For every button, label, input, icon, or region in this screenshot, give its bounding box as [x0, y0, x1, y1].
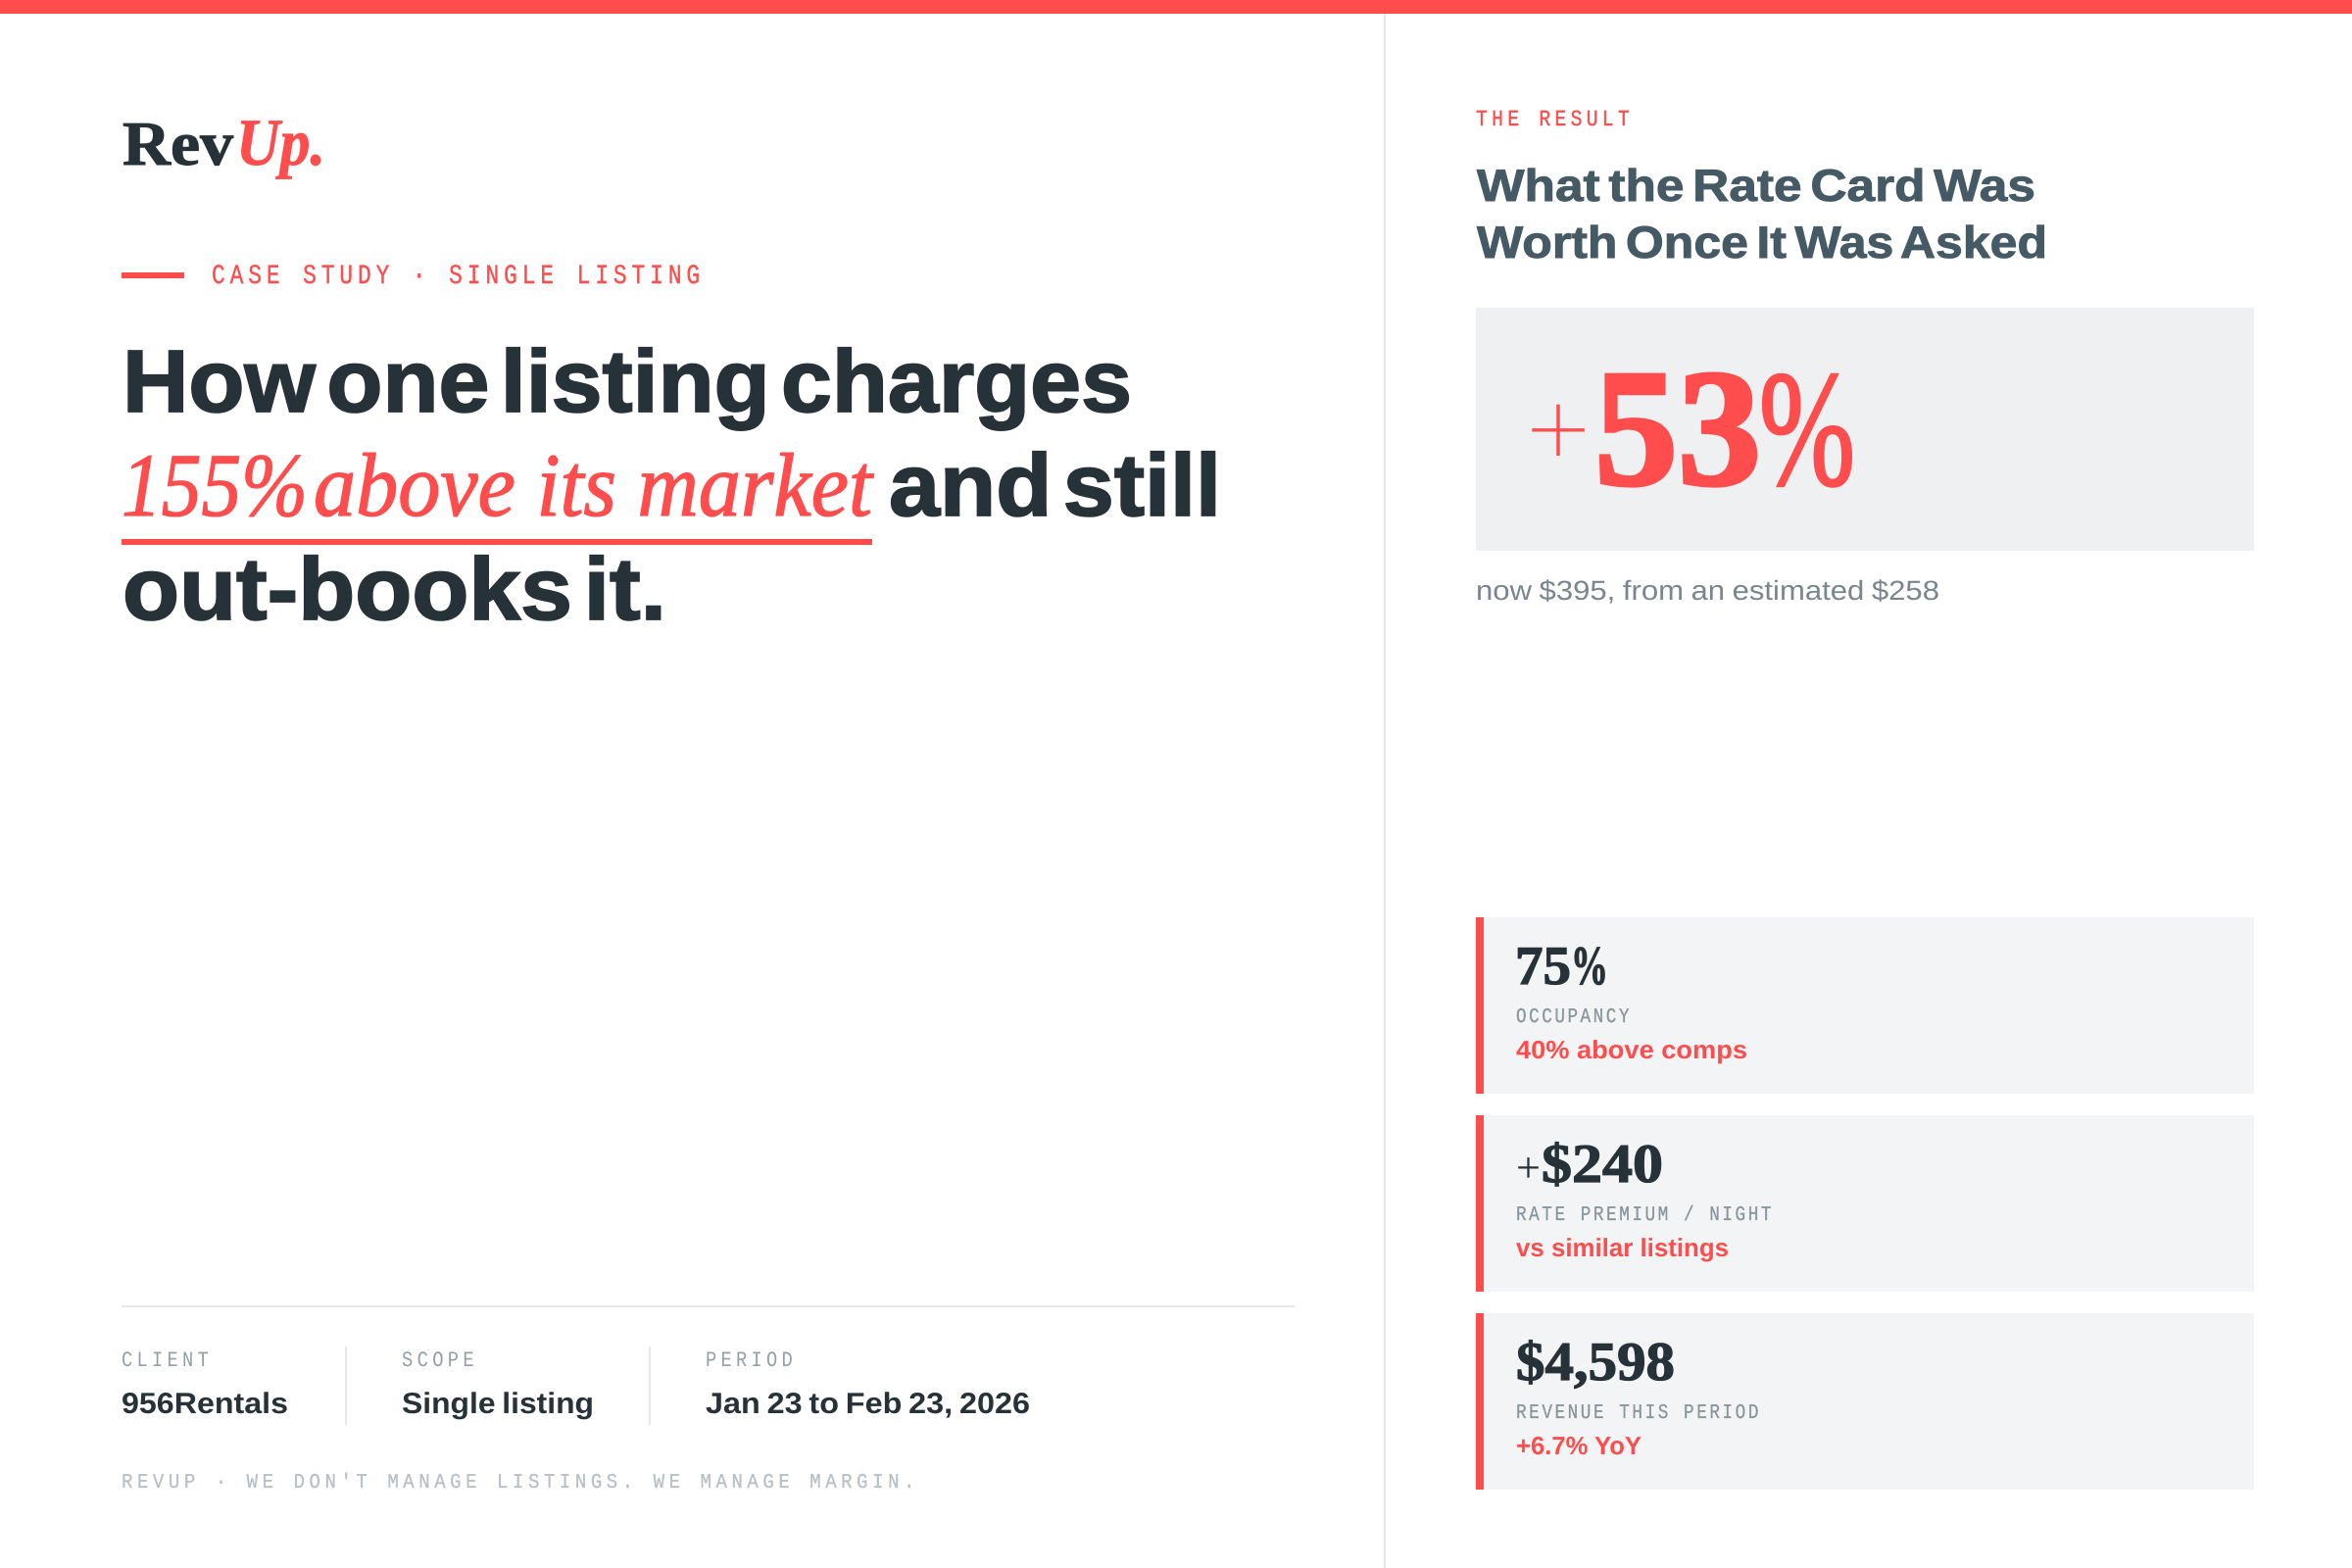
- meta: period: Jan 23 to Feb 23, 2026: [706, 1388, 1030, 1420]
- stat card: occupancy: [1476, 917, 2254, 1094]
- stat card: revenue: [1476, 1313, 2254, 1490]
- stat card: rate premium: RATE PREMIUM / NIGHT: [1516, 1204, 1774, 1227]
- meta: client: [122, 1348, 288, 1420]
- stat card: occupancy: OCCUPANCY: [1516, 1006, 1632, 1029]
- headline: out-books it.: [122, 541, 666, 639]
- stat card: rate premium: vs similar listings: [1516, 1233, 1729, 1262]
- headline: and still: [889, 437, 1221, 535]
- result heading: What the Rate Card Was: [1477, 160, 2035, 211]
- logo: Rev: [122, 109, 233, 178]
- footer tagline: REVUP · WE DON'T MANAGE LISTINGS. WE MANAGE MARGIN.: [122, 1472, 919, 1494]
- headline: [122, 333, 1221, 639]
- meta: scope: [402, 1348, 594, 1420]
- meta: period: [706, 1348, 1030, 1420]
- big stat: +53%: +: [1525, 366, 1592, 494]
- panel: left story column: [122, 105, 1295, 1494]
- headline: 155%: [122, 435, 308, 535]
- big stat: +53%: %: [1759, 338, 1855, 520]
- top accent bar: [0, 0, 2352, 14]
- stat card: rate premium: $240: [1542, 1134, 1663, 1195]
- stat card: revenue: +6.7% YoY: [1516, 1431, 1642, 1460]
- big stat: +53%: 53: [1594, 336, 1761, 520]
- headline: How one listing charges: [122, 333, 1132, 431]
- panel: the result: [1476, 107, 2254, 1490]
- result label: THE RESULT: [1476, 107, 1634, 132]
- stat card: revenue: $4,598: [1516, 1332, 1675, 1393]
- meta: scope: Single listing: [402, 1388, 594, 1420]
- stat card: rate premium: +: [1516, 1144, 1541, 1192]
- stat card: rate premium: [1476, 1115, 2254, 1292]
- result heading: Worth Once It Was Asked: [1477, 217, 2047, 268]
- big stat: +53%: [1476, 308, 2254, 551]
- stat card: occupancy: 75: [1515, 936, 1571, 997]
- headline: above its market: [314, 435, 874, 535]
- stat card: occupancy: 40% above comps: [1516, 1035, 1747, 1064]
- logo: [122, 105, 325, 179]
- stat card: occupancy: %: [1571, 936, 1608, 997]
- logo: Up.: [236, 105, 325, 179]
- meta: scope: SCOPE: [402, 1348, 478, 1373]
- meta row: client, scope, period: [122, 1305, 1295, 1425]
- meta: period: PERIOD: [706, 1348, 797, 1373]
- rate comparison note: now $395, from an estimated $258: [1476, 575, 1939, 606]
- eyebrow: CASE STUDY · SINGLE LISTING: [212, 262, 705, 292]
- meta: client: 956Rentals: [122, 1388, 288, 1420]
- stat card: revenue: REVENUE THIS PERIOD: [1516, 1402, 1761, 1425]
- result heading: [1477, 160, 2047, 268]
- meta: client: CLIENT: [122, 1348, 213, 1373]
